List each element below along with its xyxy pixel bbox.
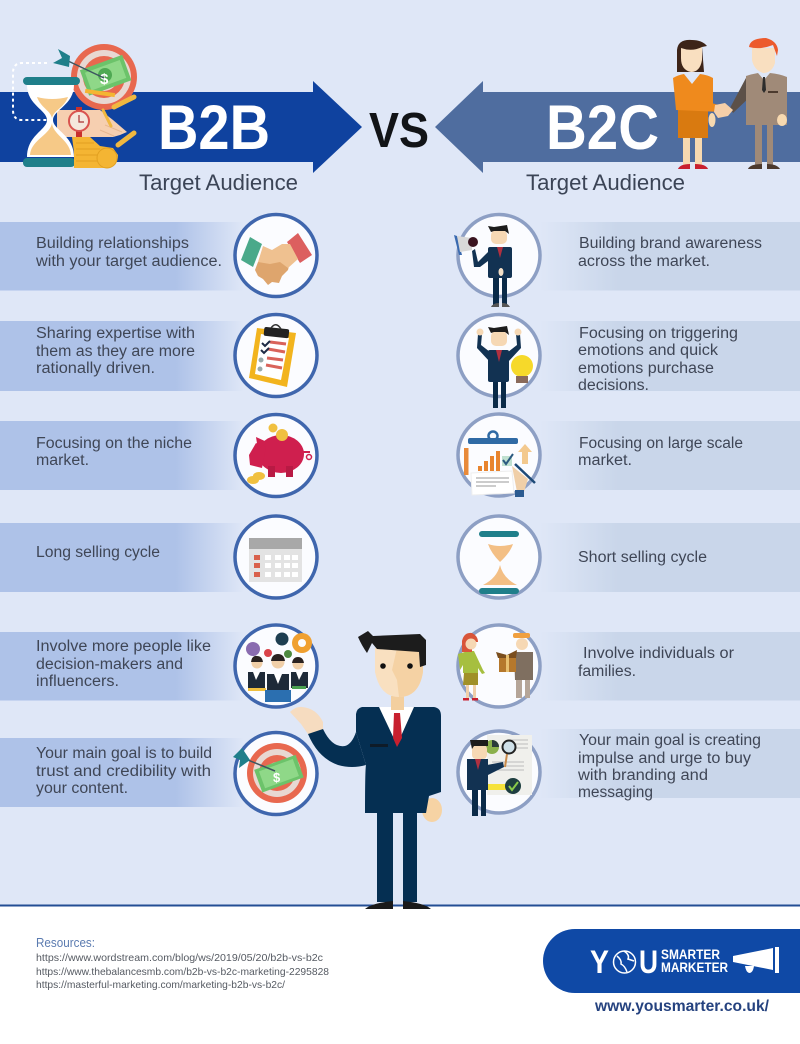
text: building relationships: with your target audience. (35, 253, 222, 270)
text: resources: https://www.wordstream.com/blog/ws/2019/05/20/b2b-vs-b2c (36, 952, 323, 964)
heading: VS: VS (369, 104, 429, 158)
text: impulse and urge: messaging (578, 784, 653, 801)
panel: B2C row 3 (540, 421, 800, 490)
icon: target and money: $ (273, 770, 281, 785)
icon: hourglass (458, 516, 540, 598)
illustration: businesswoman and businessman shaking hands (673, 38, 787, 169)
panel: B2C row 1 (540, 222, 800, 290)
illustration: hourglass, target, money and coins (13, 44, 137, 168)
icon: target and money (233, 732, 317, 814)
text: short selling cycle: Short selling cycle (578, 549, 707, 566)
text: involve more people: influencers. (36, 673, 119, 690)
text: triggering emotions: emotions purchase (578, 360, 714, 377)
icon: calendar (235, 516, 317, 598)
icon: growth chart and report (458, 414, 540, 497)
text: niche market: Focusing on the niche (36, 435, 192, 452)
panel: B2B row 1 (0, 222, 244, 290)
logo: You Smarter Marketer: MARKETER (661, 960, 728, 975)
text: resources: https://masterful-marketing.com/marketing-b2b-vs-b2c/ (36, 979, 285, 991)
text: individuals or families: Involve individuals or (583, 645, 734, 662)
text: triggering emotions: decisions. (578, 377, 649, 394)
text: impulse and urge: Your main goal is creating (579, 732, 761, 749)
text: involve more people: Involve more people like (36, 638, 211, 655)
logo: You Smarter Marketer (543, 929, 800, 993)
text: resources: https://www.thebalancesmb.com/b2b-vs-b2c-marketing-2295828 (36, 966, 329, 978)
icon: customers with gift box (458, 625, 540, 707)
text: long selling cycle: Long selling cycle (36, 544, 160, 561)
text: large scale market: Focusing on large scale (579, 435, 743, 452)
text: trust and credibility: Your main goal is to build (36, 745, 212, 762)
arrow: B2B (0, 81, 362, 173)
text: website URL: www.yousmarter.co.uk/ (594, 998, 770, 1015)
heading: B2C: B2C (546, 93, 659, 163)
icon: megaphone (733, 947, 779, 973)
panel: B2C row 6 (540, 729, 800, 801)
text: triggering emotions: emotions and quick (578, 342, 718, 359)
icon: decision-making team (235, 625, 317, 707)
illustration: central businessman (290, 631, 442, 909)
icon: businessman with report and magnifier (458, 731, 540, 816)
arrow: B2C (435, 81, 800, 173)
text: sharing expertise: rationally driven. (36, 360, 155, 377)
panel: B2B row 4 (0, 523, 244, 592)
panel: B2C row 4 (540, 523, 800, 592)
text: sharing expertise: Sharing expertise with (36, 325, 195, 342)
text: involve more people: decision-makers and (36, 656, 183, 673)
panel: B2B row 2 (0, 321, 244, 391)
text: impulse and urge: with branding and (577, 767, 708, 784)
text: resources (36, 935, 329, 991)
text: large scale market: market. (578, 452, 632, 469)
logo: You Smarter Marketer: Y (590, 944, 609, 980)
heading: B2B: B2B (158, 93, 270, 163)
icon: businessman with idea bulb (458, 314, 540, 408)
text: building relationships: Building relationships (36, 235, 189, 252)
panel: B2C row 2 (540, 321, 800, 394)
icon: businessman with megaphone (454, 214, 540, 307)
text: trust and credibility: trust and credibility with (36, 763, 211, 780)
text: brand awareness: Building brand awareness (579, 235, 762, 252)
icon: clipboard checklist (235, 314, 317, 396)
text: trust and credibility: your content. (36, 780, 128, 797)
panel: B2C row 5 (540, 632, 800, 700)
subheading: B2B target audience: Target Audience (139, 170, 298, 195)
panel: B2B row 5 (0, 632, 244, 700)
text: niche market: market. (36, 452, 89, 469)
text: resources: Resources: (36, 935, 95, 950)
logo: You Smarter Marketer: SMARTER (661, 947, 720, 962)
logo: You Smarter Marketer: U (639, 944, 658, 980)
text: sharing expertise: them as they are more (36, 343, 195, 360)
text: brand awareness: across the market. (578, 253, 710, 270)
illustration: hourglass, target, money and coins: $ (100, 71, 109, 88)
panel: B2B row 6 (0, 738, 244, 807)
icon: handshake (235, 214, 317, 296)
icon: piggy bank (235, 414, 317, 496)
text: individuals or families: families. (578, 663, 636, 680)
panel: B2B row 3 (0, 421, 244, 490)
subheading: B2C target audience: Target Audience (526, 170, 685, 195)
text: triggering emotions: Focusing on triggering (579, 325, 738, 342)
text: impulse and urge: impulse and urge to buy (578, 750, 751, 767)
